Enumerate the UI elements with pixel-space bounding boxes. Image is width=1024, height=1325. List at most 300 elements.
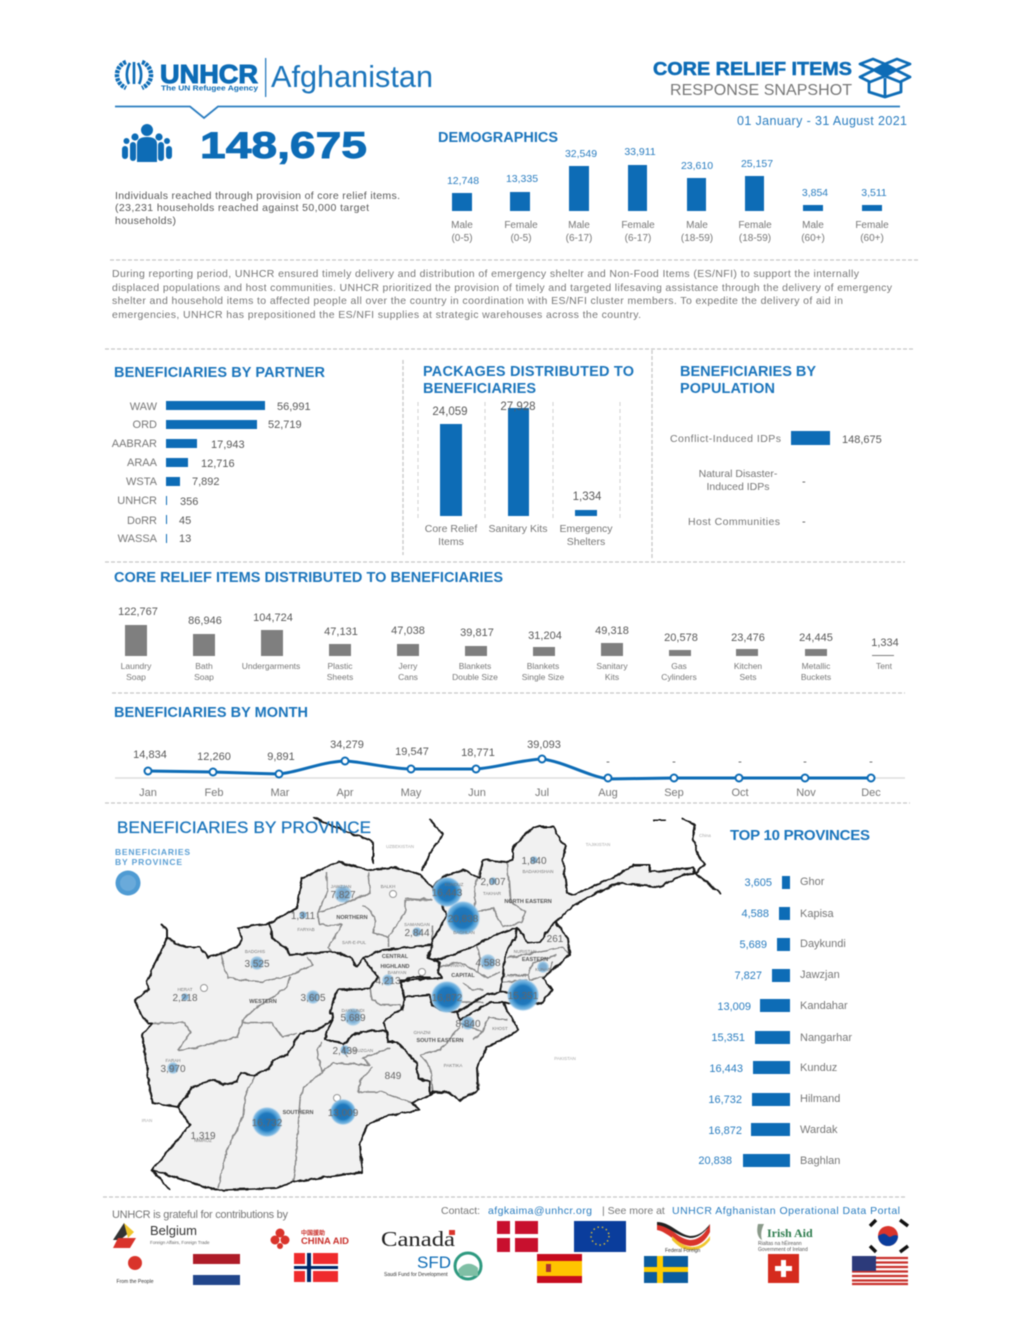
categories: Shelters	[567, 536, 605, 548]
month labels	[139, 787, 881, 799]
logo: SFD: Saudi Fund for Development	[384, 1272, 448, 1278]
values: 104,724	[253, 612, 293, 624]
values: 1,334	[871, 637, 899, 649]
labels: Host Communities	[688, 516, 780, 528]
region labels: SOUTHERN	[283, 1110, 313, 1116]
month labels: Dec	[861, 787, 881, 799]
bars	[743, 876, 790, 1167]
labels: Induced IDPs	[706, 481, 770, 493]
values: -	[738, 756, 742, 768]
neighbouring country labels: TAJIKISTAN	[586, 842, 610, 847]
province values: 2,007	[480, 877, 506, 888]
logo: Japan: From the People	[117, 1279, 154, 1285]
logo wordmark: UNHCR	[160, 59, 258, 89]
values: 16,872	[708, 1125, 742, 1137]
values: 7,892	[192, 476, 220, 488]
values: -	[672, 756, 676, 768]
icon: UN emblem	[117, 62, 151, 88]
province values: 1,319	[190, 1131, 216, 1142]
month labels: Sep	[664, 787, 684, 799]
province values: 16,872	[432, 993, 463, 1004]
logo: SFD: SFD	[417, 1253, 451, 1272]
categories: (0-5)	[510, 233, 532, 244]
categories: (6-17)	[625, 233, 651, 244]
province names: Hilmand	[800, 1093, 840, 1105]
province names: Wardak	[800, 1124, 838, 1136]
partner names: UNHCR	[117, 495, 157, 507]
city markers	[200, 890, 426, 1102]
item labels: Soap	[194, 672, 214, 682]
heading: DEMOGRAPHICS	[438, 130, 558, 146]
province values: 3,970	[160, 1064, 186, 1075]
region labels: CENTRAL	[382, 954, 409, 960]
values: 4,588	[741, 908, 769, 920]
logo: Irish Aid: Irish Aid	[767, 1226, 813, 1240]
icon: people	[122, 124, 172, 162]
values: 32,549	[565, 148, 597, 160]
values: 12,260	[197, 751, 231, 763]
flag: Netherlands	[193, 1254, 240, 1285]
country title: Afghanistan	[271, 59, 433, 94]
categories: Female	[621, 220, 655, 231]
province names: DAYKUNDI	[342, 1008, 364, 1013]
figure: 148,675	[200, 125, 367, 166]
item labels: Undergarments	[242, 661, 300, 671]
partner names: WAW	[130, 401, 158, 413]
item labels: Cylinders	[661, 672, 697, 682]
values: 86,946	[188, 615, 222, 627]
values: -	[606, 756, 610, 768]
item labels: Sheets	[327, 672, 353, 682]
values	[698, 877, 772, 1167]
contributions note: UNHCR is grateful for contributions by	[112, 1209, 288, 1221]
contact line: | See more at	[602, 1205, 665, 1217]
map: Afghanistan provinces	[135, 818, 720, 1190]
month labels: Aug	[598, 787, 618, 799]
province names: NIMROZ	[194, 1138, 212, 1143]
logo: China Aid: 中国援助	[301, 1229, 325, 1237]
region labels: SOUTH EASTERN	[416, 1038, 464, 1044]
panel: top 10 provinces	[698, 827, 870, 1167]
neighbouring country labels	[142, 833, 711, 1123]
values: 17,943	[211, 439, 245, 451]
flag: European Union	[574, 1221, 626, 1252]
categories: Items	[438, 536, 464, 548]
categories: Female	[855, 220, 889, 231]
bars	[125, 625, 894, 656]
partner names: WASSA	[118, 533, 158, 545]
item labels: Cans	[398, 672, 418, 682]
province values: 8,840	[455, 1019, 481, 1030]
neighbouring borders	[152, 818, 720, 1190]
heading: BENEFICIARIES BY	[680, 364, 816, 380]
values: 122,767	[118, 606, 158, 618]
heading: BENEFICIARIES BY MONTH	[114, 705, 308, 721]
heading: POPULATION	[680, 381, 775, 397]
province values: 2,439	[332, 1046, 358, 1057]
logo: SFD	[384, 1253, 481, 1279]
logo wordmark: The UN Refugee Agency	[161, 84, 259, 92]
province values: 7,827	[330, 890, 356, 901]
item labels: Blankets	[527, 661, 559, 671]
province values: 3,605	[300, 993, 326, 1004]
province names: HERAT	[178, 987, 193, 992]
values: 20,578	[664, 632, 698, 644]
report title: RESPONSE SNAPSHOT	[670, 82, 852, 99]
values: 13,335	[506, 173, 538, 185]
province names	[165, 869, 554, 1143]
flag: Norway	[294, 1253, 338, 1282]
province names: FARYAB	[297, 927, 315, 932]
values: 12,716	[201, 458, 235, 470]
month labels: Jun	[468, 787, 486, 799]
values: 13,009	[717, 1001, 751, 1013]
province names: URUZGAN	[351, 1048, 373, 1053]
province names: PAKTIKA	[444, 1063, 462, 1068]
region labels	[249, 899, 552, 1116]
legend: BY PROVINCE	[115, 857, 182, 867]
categories: (6-17)	[566, 233, 592, 244]
province names: Ghor	[800, 876, 825, 888]
month labels: Oct	[731, 787, 749, 799]
values: 23,610	[681, 160, 713, 172]
province values	[160, 856, 564, 1142]
values: 9,891	[267, 751, 295, 763]
flag: Denmark	[497, 1221, 538, 1252]
item labels: Sets	[739, 672, 757, 682]
values: 16,443	[709, 1063, 743, 1075]
logo: Irish Aid: Rialtas na hÉireann	[758, 1240, 802, 1247]
province names: Kunduz	[800, 1062, 837, 1074]
province names: BAGHLAN	[453, 930, 475, 935]
province values: 4,213	[375, 976, 401, 987]
partner names: WSTA	[126, 476, 158, 488]
logo: China Aid	[270, 1228, 349, 1249]
icon: relief box	[860, 59, 910, 97]
bars	[166, 401, 265, 543]
province names: KUNDUZ	[445, 882, 464, 887]
province values: 2,218	[172, 993, 198, 1004]
values: -	[869, 756, 873, 768]
categories: Sanitary Kits	[489, 523, 547, 535]
neighbouring country labels: PAKISTAN	[554, 1056, 576, 1061]
heading	[423, 364, 634, 397]
item labels: Kitchen	[734, 661, 762, 671]
values: 33,911	[624, 146, 656, 158]
summary paragraph: displaced populations and host communities. UNHCR prioritized the provision of timely and targeted lifesaving assistance through the delivery of emergency	[112, 282, 893, 294]
province names: PARWAN	[445, 963, 465, 968]
item labels: Soap	[126, 672, 146, 682]
province values: 1,311	[291, 911, 316, 922]
panel: map of beneficiaries by province	[115, 818, 720, 1190]
values: 45	[179, 515, 191, 527]
categories: (60+)	[801, 233, 825, 244]
values: 34,279	[330, 739, 364, 751]
values: -	[802, 476, 806, 488]
month labels: Feb	[205, 787, 223, 799]
values: 148,675	[842, 434, 882, 446]
partner names: ARAA	[127, 457, 158, 469]
month labels: Jul	[535, 787, 549, 799]
province names: Baghlan	[800, 1155, 840, 1167]
values: 18,771	[461, 747, 495, 759]
province values: 15,351	[508, 991, 539, 1002]
labels: Natural Disaster-	[699, 468, 778, 480]
report title: CORE RELIEF ITEMS	[653, 58, 852, 79]
values: 56,991	[277, 401, 311, 413]
logo: Japan	[117, 1256, 154, 1285]
region labels: EASTERN	[522, 957, 548, 963]
province values: 1,840	[521, 856, 547, 867]
categories: Female	[738, 220, 772, 231]
flag: Sweden	[644, 1256, 688, 1283]
categories	[425, 523, 613, 548]
values: 39,817	[460, 627, 494, 639]
key figure: total individuals	[115, 124, 400, 227]
legend	[115, 847, 190, 896]
item labels: Sanitary	[596, 661, 628, 671]
values: 24,445	[799, 632, 833, 644]
province values: 4,588	[475, 958, 501, 969]
flag: Switzerland	[768, 1254, 799, 1283]
values: 25,157	[741, 158, 773, 170]
neighbouring country labels: China	[699, 833, 711, 838]
province names: SAMANGAN	[404, 922, 430, 927]
categories: Male	[451, 220, 473, 231]
header: UNHCR logo and country title	[117, 58, 433, 97]
legend: BENEFICIARIES	[115, 847, 190, 857]
values: 19,547	[395, 746, 429, 758]
description	[115, 190, 400, 227]
values: -	[803, 756, 807, 768]
bar	[791, 431, 830, 445]
categories: Male	[568, 220, 590, 231]
item labels: Plastic	[327, 661, 353, 671]
demographics bar chart	[438, 130, 889, 244]
report title	[653, 58, 852, 99]
values: 13	[179, 533, 191, 545]
categories: (18-59)	[739, 233, 771, 244]
values	[432, 401, 602, 503]
logo: Belgium: Belgium	[150, 1223, 197, 1238]
province values: 3,525	[244, 959, 270, 970]
categories: Male	[686, 220, 708, 231]
province names: Kandahar	[800, 1000, 848, 1012]
heading: PACKAGES DISTRIBUTED TO	[423, 364, 634, 380]
logo: China Aid: CHINA AID	[301, 1236, 349, 1247]
values: -	[802, 516, 806, 528]
categories: Emergency	[559, 523, 613, 535]
values: 16,732	[708, 1094, 742, 1106]
province names: SAR-E-PUL	[342, 940, 366, 945]
values: 3,511	[861, 187, 887, 199]
values	[179, 401, 311, 545]
month labels: Mar	[271, 787, 290, 799]
province names: BALKH	[381, 884, 395, 889]
contact line: afgkaima@unhcr.org	[488, 1205, 592, 1217]
values: 15,351	[711, 1032, 745, 1044]
values: 49,318	[595, 625, 629, 637]
province names: FARAH	[165, 1058, 181, 1063]
item labels: Kits	[605, 672, 619, 682]
description: (23,231 households reached against 50,000 target	[115, 202, 369, 214]
summary paragraph: emergencies, UNHCR has prepositioned the ES/NFI supplies at strategic warehouses across the country.	[112, 309, 641, 321]
values: 23,476	[731, 632, 765, 644]
logo: Germany	[657, 1222, 710, 1254]
panel: beneficiaries by partner	[112, 365, 326, 545]
summary paragraph: shelter and household items to affected people all over the country in coordination with ES/NFI cluster members. To expedite the delivery of aid in	[112, 295, 843, 307]
values: 7,827	[734, 970, 762, 982]
province names: BADAKHSHAN	[522, 869, 554, 874]
month labels: Jan	[139, 787, 157, 799]
values: 31,204	[528, 630, 562, 642]
header rule with pointer	[115, 106, 900, 118]
values: 52,719	[268, 419, 302, 431]
categories	[451, 220, 889, 244]
province names: NURISTAN	[514, 949, 536, 954]
province names: KUNAR	[535, 967, 552, 972]
neighbouring country labels: IRAN	[142, 1118, 152, 1123]
heading: BENEFICIARIES	[423, 381, 536, 397]
heading: CORE RELIEF ITEMS DISTRIBUTED TO BENEFICIARIES	[114, 570, 503, 586]
bars	[440, 408, 597, 516]
province names	[800, 876, 852, 1167]
flag: USA	[852, 1256, 908, 1285]
heading	[680, 364, 816, 397]
logo: Irish Aid	[757, 1224, 813, 1253]
partner names: AABRAR	[112, 438, 157, 450]
region labels: HIGHLAND	[380, 964, 410, 970]
province values: 20,838	[448, 914, 479, 925]
province names: Jawzjan	[800, 969, 840, 981]
summary paragraph: During reporting period, UNHCR ensured timely delivery and distribution of emergency shelter and Non-Food Items (ES/NFI) to support the internally	[112, 268, 860, 280]
item labels: Bath	[195, 661, 213, 671]
donor logos	[113, 1220, 908, 1285]
region labels: CAPITAL	[451, 973, 475, 979]
values: 14,834	[133, 749, 167, 761]
values: 5,689	[739, 939, 767, 951]
item labels: Buckets	[801, 672, 831, 682]
description: Individuals reached through provision of core relief items.	[115, 190, 400, 202]
values: 3,854	[802, 187, 828, 199]
item labels: Jerry	[399, 661, 418, 671]
categories: Male	[802, 220, 824, 231]
labels: Conflict-Induced IDPs	[670, 433, 781, 445]
province values: 16,443	[432, 888, 463, 899]
labels	[670, 433, 781, 528]
panel: core relief items distributed	[114, 570, 899, 682]
values: 3,605	[744, 877, 772, 889]
province names: KHOST	[492, 1026, 508, 1031]
flag: Spain	[537, 1254, 582, 1283]
item labels: Laundry	[121, 661, 152, 671]
panel: beneficiaries by population	[670, 364, 882, 528]
values: 24,059	[432, 406, 468, 418]
province names: Daykundi	[800, 938, 846, 950]
region labels: WESTERN	[249, 999, 277, 1005]
province names: TAKHAR	[483, 891, 502, 896]
categories: Female	[504, 220, 538, 231]
values: 356	[180, 496, 198, 508]
panel: packages distributed	[418, 364, 634, 548]
categories: Core Relief	[425, 523, 477, 535]
panel: beneficiaries by month	[114, 705, 905, 799]
logo: Belgium: Foreign Affairs, Foreign Trade	[150, 1240, 210, 1245]
values	[133, 739, 873, 768]
contact line	[441, 1205, 900, 1217]
logo: Irish Aid: Government of Ireland	[758, 1247, 808, 1253]
partner names: DoRR	[127, 515, 157, 527]
values: 12,748	[447, 175, 479, 187]
item labels: Double Size	[452, 672, 498, 682]
heading: BENEFICIARIES BY PARTNER	[114, 365, 326, 381]
province values: 16,732	[252, 1118, 283, 1129]
province names: JAWZJAN	[331, 884, 351, 889]
item labels: Single Size	[522, 672, 565, 682]
region labels: NORTH EASTERN	[504, 899, 552, 905]
month labels: May	[401, 787, 422, 799]
values: 27,928	[500, 401, 536, 413]
values: 1,334	[573, 491, 602, 503]
month labels: Nov	[796, 787, 816, 799]
values	[118, 606, 899, 649]
province names: Kapisa	[800, 908, 835, 920]
values	[802, 434, 882, 528]
logo: Germany: Federal Foreign	[665, 1248, 701, 1254]
province names: GHAZNI	[413, 1030, 431, 1035]
item labels: Gas	[671, 661, 687, 671]
values: 39,093	[527, 739, 561, 751]
categories: (60+)	[860, 233, 884, 244]
values: 47,131	[324, 626, 358, 638]
heading: BENEFICIARIES BY PROVINCE	[117, 818, 371, 837]
logo: Belgium	[113, 1223, 210, 1248]
province values: 5,689	[340, 1013, 366, 1024]
heading: TOP 10 PROVINCES	[730, 827, 870, 844]
contact line: Contact:	[441, 1205, 480, 1217]
province names: LAGHMAN	[504, 973, 526, 978]
partner names: ORD	[133, 419, 157, 431]
bubbles	[167, 856, 549, 1137]
province values: 849	[385, 1071, 402, 1082]
summary paragraph	[112, 268, 893, 321]
logo: Canada: Canada	[381, 1227, 456, 1251]
line chart	[144, 756, 874, 782]
neighbouring country labels: UZBEKISTAN	[386, 844, 414, 849]
date range: 01 January - 31 August 2021	[737, 114, 907, 128]
values	[447, 146, 887, 199]
contact line: UNHCR Afghanistan Operational Data Portal	[672, 1205, 900, 1217]
item labels	[121, 661, 893, 682]
item labels: Metallic	[802, 661, 831, 671]
province names: BADGHIS	[245, 949, 265, 954]
province values: 2,844	[404, 928, 430, 939]
values: 47,038	[391, 625, 425, 637]
description: households)	[115, 215, 176, 227]
bars	[452, 165, 882, 211]
categories: (18-59)	[681, 233, 713, 244]
item labels: Tent	[876, 661, 893, 671]
item labels: Blankets	[459, 661, 491, 671]
province values: 13,009	[328, 1108, 359, 1119]
categories: (0-5)	[451, 233, 473, 244]
province names: BAMYAN	[388, 970, 406, 975]
region labels: NORTHERN	[336, 915, 368, 921]
month labels: Apr	[336, 787, 354, 799]
partner names	[112, 401, 158, 545]
province values: 261	[547, 934, 564, 945]
flag: South Korea	[870, 1220, 908, 1252]
